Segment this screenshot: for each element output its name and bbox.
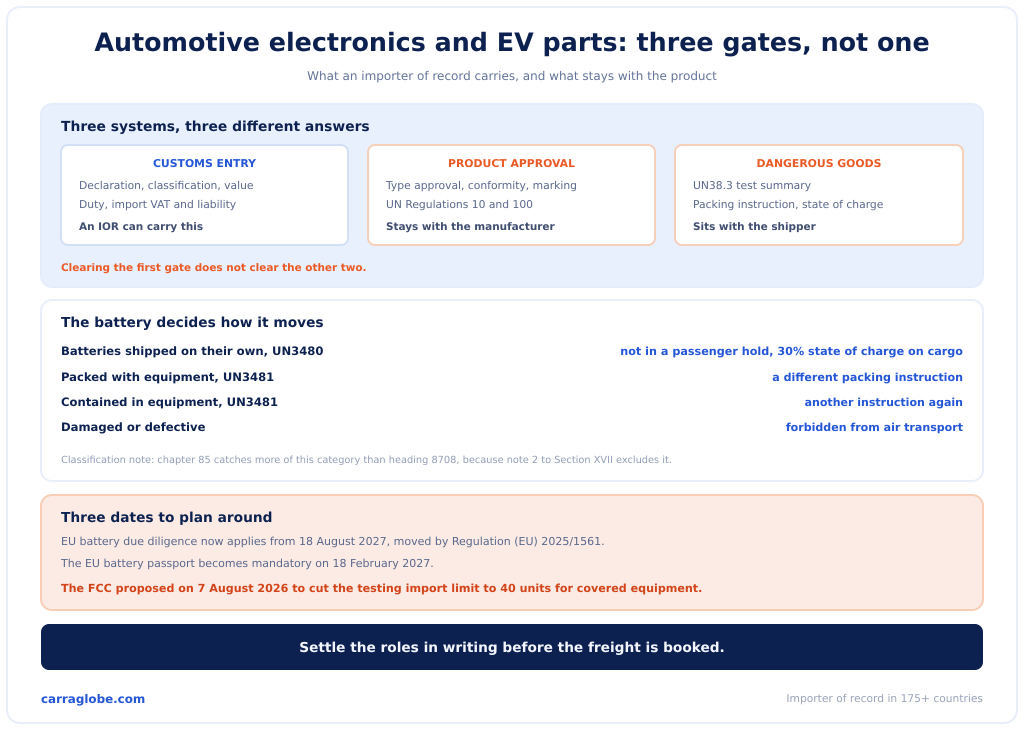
panel: three systems (40, 103, 984, 288)
footer: site: carraglobe.com (41, 692, 145, 706)
date line 2: The EU battery passport becomes mandatory on 18 February 2027. (61, 557, 434, 570)
card line 2: UN Regulations 10 and 100 (386, 198, 533, 211)
row 4 label: Damaged or defective (61, 420, 205, 434)
card verdict: Stays with the manufacturer (386, 221, 555, 233)
banner (41, 624, 983, 670)
card lines: Declaration, classification, value (79, 179, 254, 192)
row 1 label: Batteries shipped on their own, UN3480 (61, 344, 323, 358)
heading: battery: The battery decides how it moves (61, 315, 324, 331)
classification note: Classification note: chapter 85 catches more of this category than heading 8708, because note 2 to Section XVII excludes it. (61, 455, 672, 466)
row 2 value: a different packing instruction (772, 371, 963, 384)
row 4 value: forbidden from air transport (786, 421, 963, 434)
card heading: CUSTOMS ENTRY (153, 157, 256, 170)
date line 3: The FCC proposed on 7 August 2026 to cut the testing import limit to 40 units for covered equipment. (61, 582, 702, 595)
title: Automotive electronics and EV parts: three gates, not one (94, 27, 930, 57)
card lines: Type approval, conformity, marking (386, 179, 577, 192)
card: product approval (367, 144, 656, 246)
subtitle: What an importer of record carries, and what stays with the product (307, 69, 717, 83)
card: customs entry (60, 144, 349, 246)
card verdict: Sits with the shipper (693, 221, 816, 233)
heading: three dates: Three dates to plan around (61, 510, 273, 526)
footer: tagline: Importer of record in 175+ countries (786, 692, 983, 705)
card heading: PRODUCT APPROVAL (448, 157, 575, 170)
banner: Settle the roles in writing before the freight is booked. (299, 640, 725, 656)
row 1 value: not in a passenger hold, 30% state of charge on cargo (620, 345, 963, 358)
card verdict: An IOR can carry this (79, 221, 203, 233)
date line 1: EU battery due diligence now applies from 18 August 2027, moved by Regulation (EU) 2025/1561. (61, 535, 605, 548)
card: dangerous goods (674, 144, 964, 246)
row 2 label: Packed with equipment, UN3481 (61, 370, 274, 384)
card lines: UN38.3 test summary (693, 179, 811, 192)
callout: first gate: Clearing the first gate does not clear the other two. (61, 262, 367, 274)
card heading: DANGEROUS GOODS (757, 157, 881, 170)
row 3 label: Contained in equipment, UN3481 (61, 395, 278, 409)
heading: three systems: Three systems, three different answers (61, 119, 370, 135)
card line 2: Packing instruction, state of charge (693, 198, 883, 211)
card line 2: Duty, import VAT and liability (79, 198, 236, 211)
row 3 value: another instruction again (805, 396, 963, 409)
panel: three dates (40, 494, 984, 611)
panel: battery (40, 299, 984, 482)
